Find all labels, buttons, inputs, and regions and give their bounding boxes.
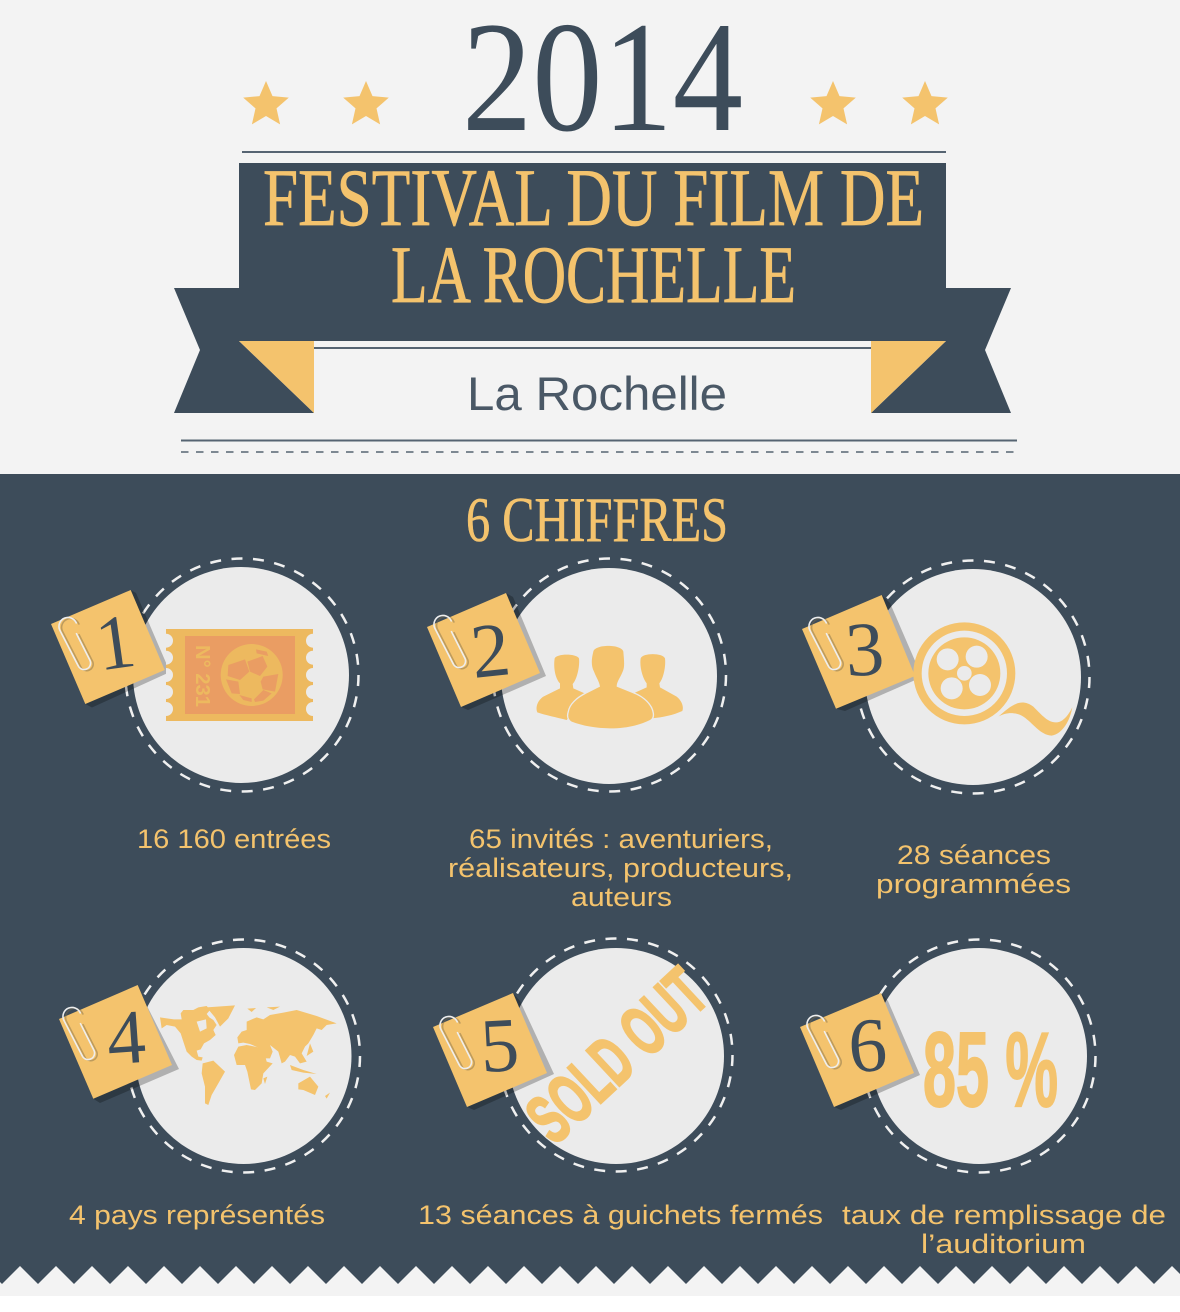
icon: people (537, 646, 683, 728)
caption 4: 4 pays représentés (69, 1200, 325, 1230)
ribbon banner (174, 163, 1011, 413)
item 5: sold out (433, 938, 732, 1172)
note 5 (433, 993, 547, 1107)
festival title (263, 152, 924, 320)
note 5: 5 (478, 1001, 521, 1089)
note 6 (800, 993, 914, 1107)
note 3 (802, 595, 915, 709)
note 3: 3 (843, 605, 886, 693)
festival title: FESTIVAL DU FILM DE (263, 152, 924, 243)
icon: ticket (166, 629, 313, 721)
dark panel (0, 474, 1180, 1284)
icon: world map (160, 1005, 337, 1105)
item 2: guests (427, 558, 726, 792)
note 2 (427, 593, 540, 707)
section heading: 6 CHIFFRES (466, 484, 728, 555)
icon: film reel (913, 622, 1072, 736)
item 3: screenings (802, 560, 1090, 794)
header (174, 0, 1017, 452)
percentage: 85 % (923, 1011, 1058, 1129)
caption 2: 65 invités : aventuriers, (469, 824, 773, 854)
caption 2: auteurs (571, 882, 672, 912)
caption 6 (842, 1200, 1166, 1259)
zigzag edge (0, 1266, 1180, 1284)
festival title: LA ROCHELLE (391, 229, 796, 320)
caption 3: 28 séances (897, 840, 1051, 870)
caption 3: programmées (876, 869, 1071, 899)
note 2: 2 (467, 605, 514, 695)
icon: ticket: N° 231 (191, 645, 213, 707)
location: La Rochelle (467, 367, 727, 420)
note 4: 4 (104, 993, 148, 1081)
item 4: countries (59, 940, 360, 1172)
note 1: 1 (90, 597, 140, 688)
caption 2: réalisateurs, producteurs, (448, 853, 793, 883)
caption 2 (448, 824, 793, 912)
item 6: attendance (800, 940, 1096, 1172)
caption 6: taux de remplissage de (842, 1200, 1166, 1230)
stars (243, 81, 948, 124)
note 4 (59, 985, 172, 1099)
caption 6: l’auditorium (921, 1229, 1086, 1259)
caption 5: 13 séances à guichets fermés (418, 1200, 823, 1230)
note 1 (51, 590, 165, 704)
caption 3 (876, 840, 1071, 899)
caption 1: 16 160 entrées (137, 824, 331, 854)
note 6: 6 (846, 1001, 889, 1089)
item 1: entries (51, 558, 358, 792)
sold out stamp: SOLD OUT (511, 954, 722, 1157)
